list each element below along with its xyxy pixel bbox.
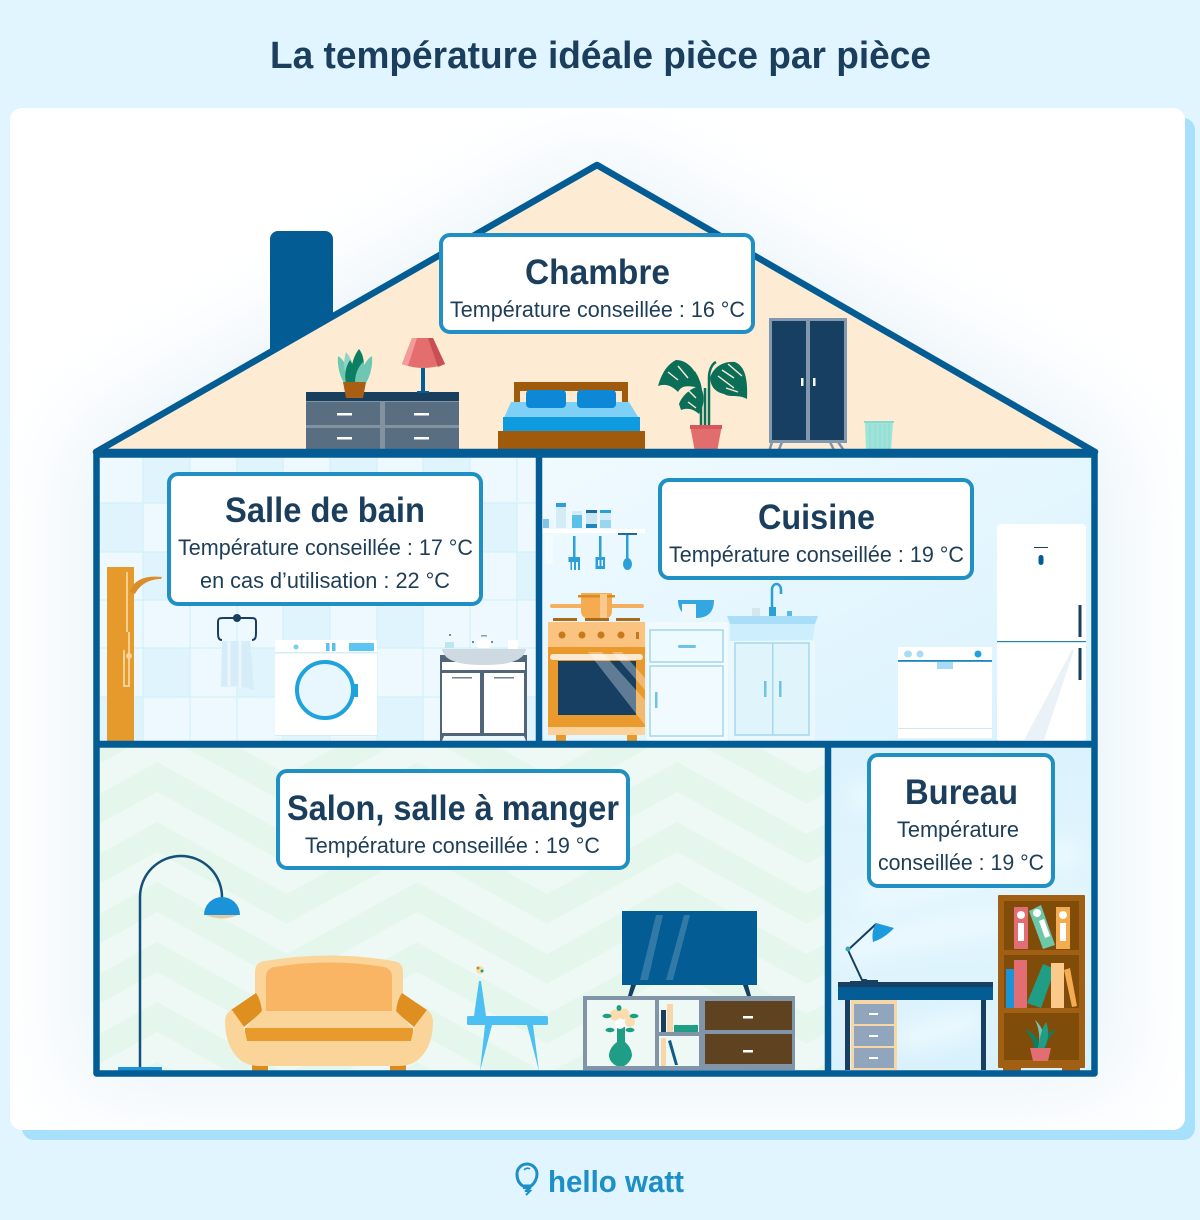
label: Chambre: Chambre (525, 253, 670, 292)
icon: dresser (306, 392, 459, 452)
label: Cuisine (660, 480, 972, 578)
logo: hello watt: hello watt (548, 1164, 684, 1199)
chimney (270, 231, 333, 360)
office wall background (828, 745, 1095, 1073)
binders (1014, 905, 1070, 949)
icon: desk with drawers (838, 982, 993, 1070)
icon: floor lamp (118, 856, 240, 1071)
icon: shower (107, 567, 162, 742)
house structure: roof and walls (96, 165, 1095, 1074)
label: Salle de bain: en cas d’utilisation : 22 °C (200, 568, 450, 593)
label: Chambre: Température conseillée : 16 °C (450, 297, 745, 322)
label: Bureau (869, 755, 1053, 886)
kitchen wall background (538, 455, 1095, 743)
icon: kitchen cabinet with bowl (647, 600, 728, 742)
icon: wardrobe (769, 318, 847, 452)
label: Bureau: Température (897, 817, 1019, 842)
attic room: chambre background (97, 165, 1095, 452)
title: La température idéale pièce par pièce (270, 35, 931, 77)
icon: kitchen shelf with jars (543, 503, 645, 564)
label: Salle de bain: Température conseillée : 17 °C (178, 535, 473, 560)
icon: sofa (225, 956, 433, 1071)
icon: oven with pot (548, 593, 645, 741)
icon: kitchen sink cabinet (727, 584, 818, 741)
label: Chambre (441, 235, 753, 332)
living room wall background (97, 745, 828, 1073)
icon: washing machine (275, 640, 377, 739)
icon: bed (498, 382, 645, 452)
icon: waste bin (864, 421, 894, 452)
label: Bureau: Bureau (905, 773, 1018, 812)
icon: potted plant on dresser (338, 349, 372, 398)
label: Bureau: conseillée : 19 °C (878, 850, 1044, 875)
label: Salle de bain (169, 474, 481, 604)
icon: monstera plant (658, 360, 747, 452)
plant on bookcase (1025, 1020, 1056, 1061)
icon: dishwasher (898, 647, 992, 738)
label: Salle de bain: Salle de bain (225, 491, 425, 530)
icon: table lamp (402, 338, 445, 393)
bathroom wall tiles (97, 455, 538, 743)
label: Salon, salle à manger: Température conseillée : 19 °C (305, 833, 600, 858)
label: Salon, salle à manger (278, 771, 628, 868)
label: Cuisine: Température conseillée : 19 °C (669, 542, 964, 567)
icon: side table with vase (467, 966, 548, 1071)
icon: bookcase (998, 895, 1085, 1071)
label: Cuisine: Cuisine (758, 498, 875, 537)
icon: fridge (997, 524, 1086, 742)
icon: bathroom sink cabinet (440, 634, 527, 742)
icon: hanging utensils (568, 533, 637, 570)
label: Salon, salle à manger: Salon, salle à manger (287, 789, 619, 828)
icon: TV stand (583, 996, 795, 1070)
icon: towel ring (218, 614, 256, 690)
books (1006, 960, 1077, 1008)
icon: television (622, 911, 757, 996)
icon: desk lamp (846, 923, 894, 982)
